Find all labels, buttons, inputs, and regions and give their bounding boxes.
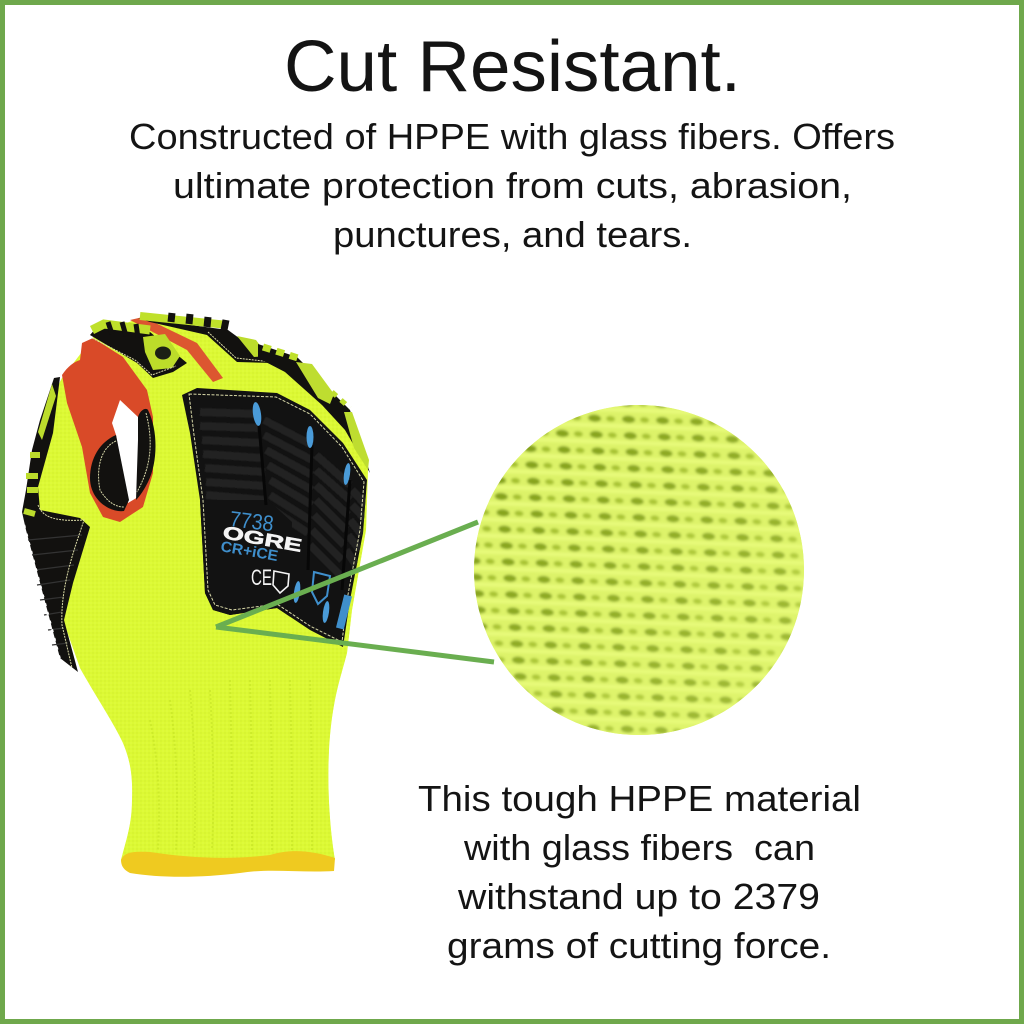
panel stitching <box>189 394 364 642</box>
model number: 7738 <box>228 506 275 536</box>
magnified fabric swatch <box>474 405 804 735</box>
intro text block: ultimate protection from cuts, abrasion, <box>173 165 852 206</box>
yellow cuff hem <box>121 851 335 877</box>
intro text block: Constructed of HPPE with glass fibers. Offers <box>129 116 895 157</box>
glove illustration <box>22 313 370 877</box>
knit texture <box>36 316 368 860</box>
blue cut shield <box>312 572 330 604</box>
intro text block <box>129 116 895 255</box>
product line: CR+iCE <box>219 538 279 565</box>
intro text block: punctures, and tears. <box>333 214 692 255</box>
right black finger flap <box>136 409 156 500</box>
orange finger stripe <box>130 317 223 382</box>
knuckle guard 3 <box>258 344 370 473</box>
shield mark <box>273 571 289 593</box>
description text block: withstand up to 2379 <box>457 876 820 917</box>
description text block: This tough HPPE material <box>418 778 861 819</box>
brand logo: OGRE <box>221 522 304 556</box>
left black finger flap <box>90 435 129 511</box>
knuckle guard 2 <box>138 313 273 363</box>
black back-of-hand panel <box>182 388 367 647</box>
orange palm coating <box>62 338 153 522</box>
left thumb guard <box>22 377 90 672</box>
description text block <box>418 778 861 966</box>
blue studs <box>251 402 352 623</box>
blue side label <box>336 595 352 629</box>
knuckle guard 1 <box>90 322 187 378</box>
flap stitching <box>99 413 150 507</box>
glove body <box>36 316 368 860</box>
certification mark: CE <box>251 565 272 590</box>
description text block: with glass fibers can <box>463 827 815 868</box>
title: Cut Resistant. <box>284 27 741 107</box>
description text block: grams of cutting force. <box>447 925 831 966</box>
wrist ribbing <box>150 680 312 850</box>
panel ribs <box>198 412 366 620</box>
callout lines <box>216 522 494 662</box>
white gap between fingers <box>112 400 138 503</box>
